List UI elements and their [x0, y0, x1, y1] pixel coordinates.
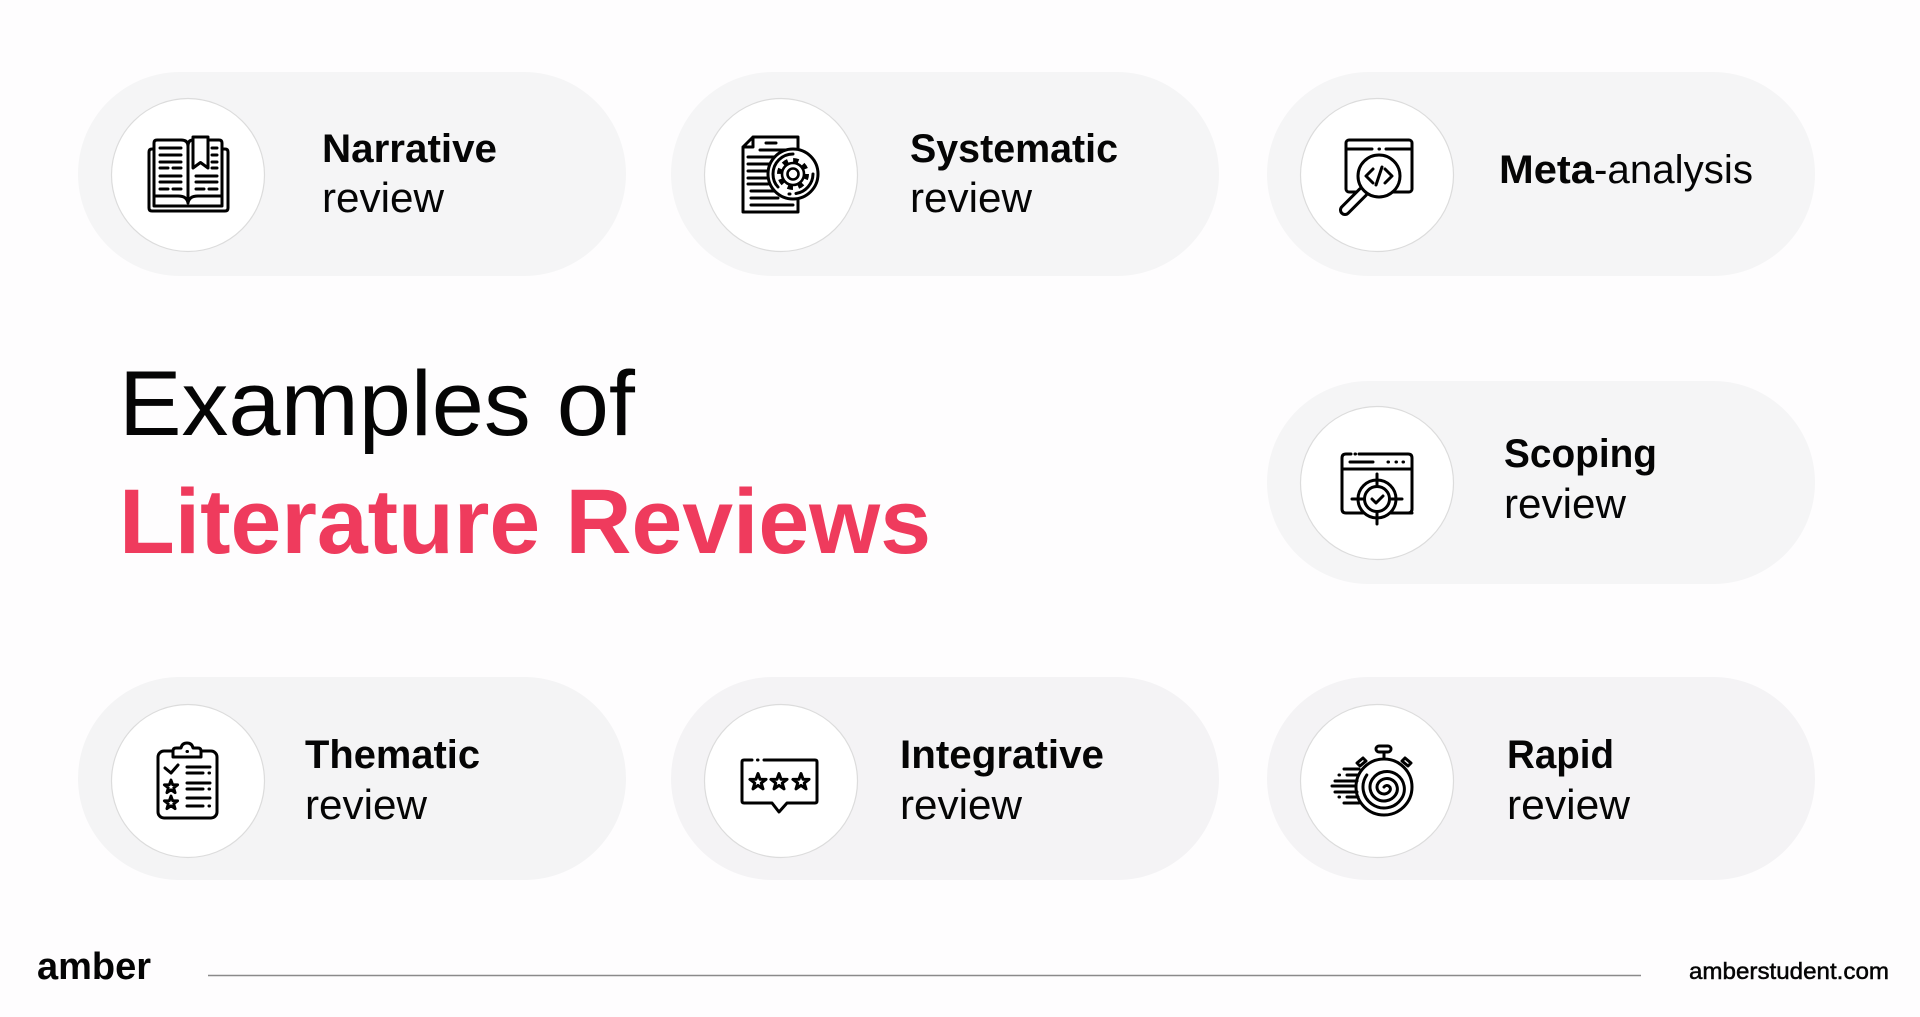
title: Literature Reviews [119, 471, 931, 573]
icon: speech bubble with stars [742, 760, 817, 812]
icon: document with gear [743, 137, 818, 212]
panel: thematic review [78, 677, 626, 880]
icon: spiral stopwatch [1332, 746, 1412, 816]
label: scoping review: review [1504, 480, 1627, 527]
label: thematic review: review [305, 781, 428, 828]
icon: browser window with target [1342, 454, 1412, 524]
label: rapid review: Rapid [1507, 733, 1614, 777]
title [119, 353, 931, 573]
label: meta-analysis: -analysis [1594, 148, 1753, 192]
panel: systematic review [671, 72, 1219, 276]
icon: browser window with magnifier [1345, 140, 1412, 210]
title: Examples of [119, 353, 635, 455]
label: rapid review: review [1507, 781, 1631, 828]
label: meta-analysis: Meta [1499, 148, 1595, 192]
icon: open book [149, 137, 228, 211]
panel: narrative review [78, 72, 626, 276]
label: integrative review: Integrative [900, 733, 1104, 777]
label: systematic review: Systematic [910, 127, 1118, 171]
panel: scoping review [1267, 381, 1815, 584]
label: thematic review: Thematic [305, 733, 480, 777]
website url: amberstudent.com [1689, 958, 1889, 984]
icon: clipboard checklist [158, 743, 217, 818]
panel: rapid review [1267, 677, 1815, 880]
logo: amber: amber [37, 946, 151, 988]
label: narrative review: Narrative [322, 127, 497, 171]
panel: integrative review [671, 677, 1219, 880]
label: scoping review: Scoping [1504, 432, 1657, 476]
label: narrative review: review [322, 174, 445, 221]
label: systematic review: review [910, 174, 1033, 221]
label: integrative review: review [900, 781, 1023, 828]
panel: meta-analysis [1267, 72, 1815, 276]
